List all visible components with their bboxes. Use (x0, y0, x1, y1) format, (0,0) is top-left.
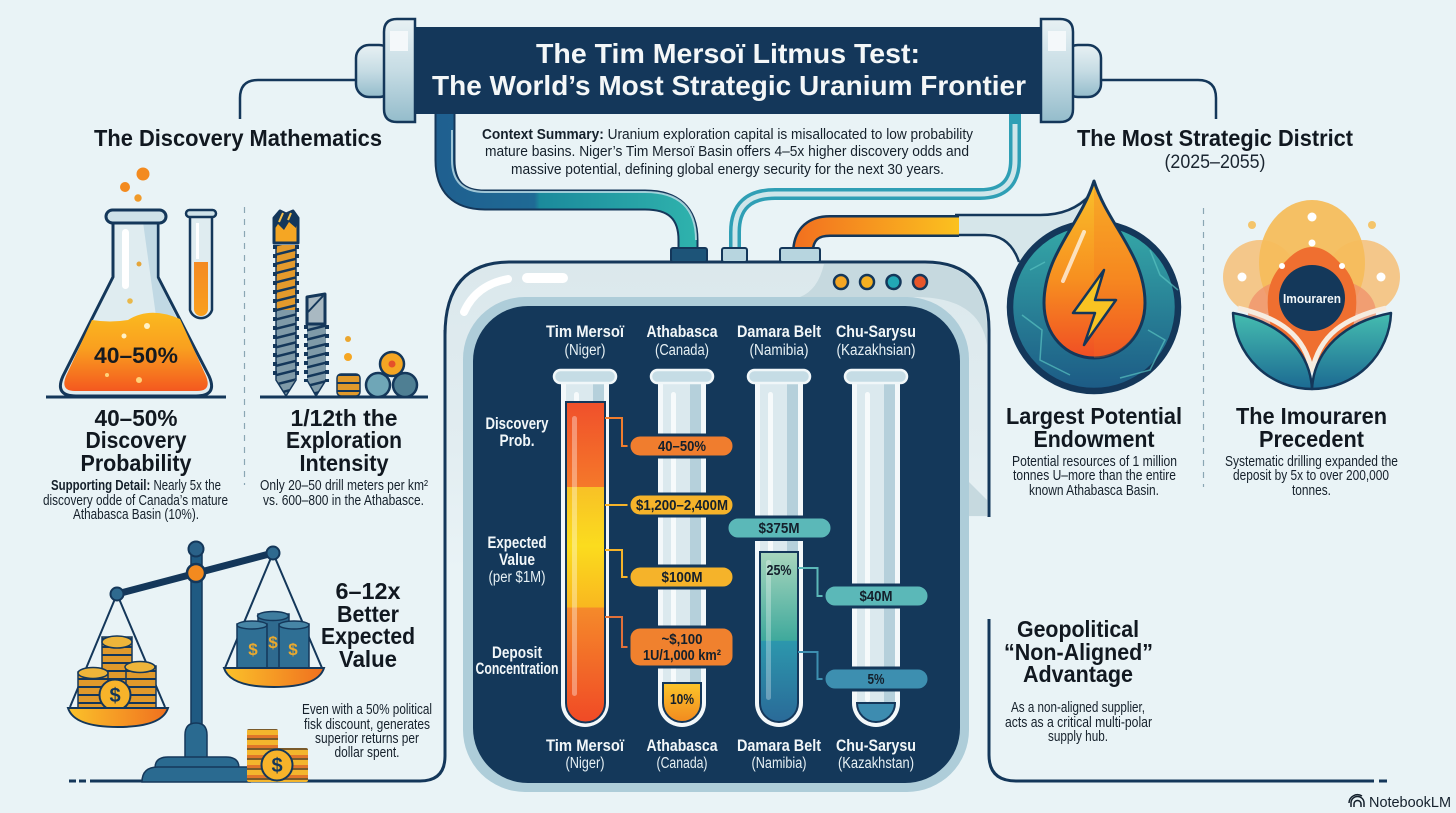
bottom column labels: (Canada) (656, 755, 708, 772)
row labels: Expected (488, 534, 546, 552)
barrels on right pan (237, 612, 309, 668)
stat: Imouraren precedent (1236, 403, 1387, 452)
detail: Imouraren (1225, 454, 1398, 499)
stat: better expected value: 6–12x (336, 578, 401, 604)
context summary: massive potential, defining global energy security for the next 30 years. (511, 162, 944, 178)
floor coin stack (247, 729, 308, 782)
bottom column labels (546, 737, 916, 772)
left pan (68, 708, 168, 727)
top column labels: Athabasca (646, 323, 718, 341)
pipes (445, 114, 1092, 290)
divider (244, 207, 246, 485)
stat: better expected value (321, 578, 415, 672)
bottom column labels: Tim Mersoï (546, 737, 624, 755)
pill values: $40M (860, 588, 892, 605)
core stack (337, 374, 360, 396)
banner right end cap (1041, 19, 1101, 122)
detail: Imouraren: deposit by 5x to over 200,000 (1233, 468, 1389, 484)
row labels: Value (499, 551, 535, 569)
icon: Imouraren flower (1223, 200, 1400, 389)
barrels on right pan: $ (288, 640, 298, 659)
coins on left pan: $ (109, 685, 121, 707)
row labels: (per $1M) (488, 569, 546, 586)
pill values: 5% (868, 671, 884, 688)
device top outline (445, 262, 989, 610)
floor coin stack: $ (271, 755, 283, 777)
stat: non-aligned advantage: Geopolitical (1017, 616, 1139, 642)
pill values (636, 438, 892, 708)
leaf halo (1238, 308, 1386, 372)
pill values: 25% (766, 562, 792, 579)
pill values: ~$,100 (662, 631, 702, 648)
footer dashes (69, 780, 86, 782)
title text: The World’s Most Strategic Uranium Frontier (432, 70, 1026, 101)
stat: largest potential endowment (1006, 403, 1182, 452)
detail: endowment: known Athabasca Basin. (1029, 483, 1159, 499)
detail: expected value (302, 702, 432, 761)
stat: largest potential endowment: Largest Potential (1006, 403, 1182, 429)
divider (1202, 208, 1204, 487)
center circle (1279, 265, 1345, 331)
device shaded corner (800, 264, 987, 345)
ore samples (344, 336, 417, 397)
heading: most strategic district: The Most Strategic District (1077, 125, 1353, 151)
pill values: 10% (670, 691, 694, 708)
stat: largest potential endowment: Endowment (1034, 426, 1155, 452)
context summary: mature basins. Niger’s Tim Mersoï Basin offers 4–5x higher discovery odds and (485, 144, 969, 160)
detail: non-aligned: acts as a critical multi-polar (1005, 715, 1152, 731)
left connector line (240, 80, 355, 119)
stat: better expected value: Value (339, 646, 397, 672)
stat: discovery probability: Probability (80, 450, 192, 476)
pill values: 40–50% (658, 438, 706, 455)
detail: discovery probability (43, 478, 228, 523)
large drill bit (274, 211, 298, 396)
pill values: $100M (662, 569, 702, 586)
pill values: $1,200–2,400M (636, 497, 728, 514)
pill values: $375M (758, 520, 800, 537)
screen bezel (463, 297, 969, 792)
bottom column labels: (Niger) (566, 755, 604, 772)
pipe: light teal (735, 114, 1015, 250)
title text: The Tim Mersoï Litmus Test: (536, 38, 920, 69)
leaves (1233, 313, 1312, 389)
right pan (224, 668, 324, 687)
stat: exploration intensity: Exploration (286, 427, 402, 453)
detail: endowment: Potential resources of 1 million (1012, 454, 1177, 470)
stat: non-aligned advantage (1004, 616, 1153, 687)
detail: Imouraren: Systematic drilling expanded the (1225, 454, 1398, 470)
row labels: Discovery (486, 415, 549, 433)
top column labels: Chu-Sarysu (836, 323, 916, 341)
stat: discovery probability: Discovery (86, 427, 187, 453)
detail: expected value: Even with a 50% political (302, 702, 432, 718)
context summary: Context Summary: Uranium exploration capital is misallocated to low probability (482, 127, 974, 143)
scale stand (142, 549, 250, 782)
value pills (629, 435, 929, 690)
tube: Damara Belt (748, 370, 810, 727)
detail: exploration intensity: Only 20–50 drill meters per km² (260, 478, 428, 494)
icon: energy drop on globe (1010, 181, 1178, 391)
stat: non-aligned advantage: “Non-Aligned” (1004, 639, 1153, 665)
ground lines (46, 396, 428, 398)
icon: balance scale (68, 542, 324, 782)
flask label: 40–50% (94, 343, 178, 368)
tube: Chu-Sarysu (845, 370, 907, 727)
context summary (482, 127, 974, 178)
barrels on right pan: $ (268, 633, 278, 652)
device lower-right facet (969, 482, 987, 516)
stat: discovery probability: 40–50% (94, 405, 178, 431)
left frame line (90, 330, 445, 781)
detail: non-aligned (1005, 700, 1152, 745)
stat: discovery probability (80, 405, 192, 476)
leader lines (605, 418, 825, 679)
stat: Imouraren precedent: Precedent (1259, 426, 1364, 452)
heading: most strategic district: (2025–2055) (1164, 152, 1266, 173)
top column labels: (Namibia) (750, 342, 808, 359)
dark screen (473, 306, 960, 783)
status lights (834, 275, 927, 289)
detail: expected value: superior returns per (315, 731, 419, 747)
barrels on right pan: $ (248, 640, 258, 659)
stat: better expected value: Expected (321, 623, 415, 649)
title banner (356, 19, 1101, 122)
tube: Athabasca (651, 370, 713, 727)
scale beam (117, 553, 273, 594)
bottom column labels: (Namibia) (752, 755, 806, 772)
title text (432, 38, 1026, 101)
pipe: orange (803, 226, 959, 250)
detail: non-aligned: As a non-aligned supplier, (1011, 700, 1145, 716)
detail: expected value: fisk discount, generates (304, 717, 430, 733)
small drill bit (306, 294, 327, 396)
stat: exploration intensity (286, 405, 402, 476)
right frame line (989, 619, 1387, 781)
stat: exploration intensity: Intensity (300, 450, 389, 476)
heading: discovery mathematics: The Discovery Mathematics (94, 125, 382, 151)
scale strings (70, 553, 322, 707)
detail: Imouraren: tonnes. (1292, 483, 1331, 499)
bottom column labels: Chu-Sarysu (836, 737, 916, 755)
detail: discovery probability: Supporting Detail: Nearly 5x the (51, 478, 221, 494)
icon: drill bits (274, 211, 417, 397)
detail: discovery probability: Athabasca Basin (10%). (73, 507, 199, 523)
coins on left pan (78, 636, 156, 710)
device body (445, 262, 989, 792)
top column labels: (Canada) (655, 342, 709, 359)
top column labels: (Kazakhsian) (836, 342, 916, 359)
icon: test tube (186, 210, 216, 318)
detail: non-aligned: supply hub. (1048, 729, 1108, 745)
top column labels: Tim Mersoï (546, 323, 624, 341)
detail: exploration intensity: vs. 600–800 in the Athabasce. (263, 493, 424, 509)
panel: test tube comparison device (445, 248, 989, 792)
bottom column labels: Damara Belt (737, 737, 821, 755)
heading: most strategic district (1077, 125, 1353, 173)
row labels: Concentration (476, 660, 558, 678)
icon: flask (60, 168, 212, 396)
banner bar (415, 27, 1042, 114)
stat: Imouraren precedent: The Imouraren (1236, 403, 1387, 429)
right connector line (1101, 80, 1216, 119)
banner left end cap (356, 19, 415, 122)
pill values: 1U/1,000 km² (643, 647, 721, 664)
row labels: Prob. (500, 432, 534, 450)
row labels (476, 415, 558, 678)
device highlights (464, 279, 508, 312)
stat: exploration intensity: 1/12th the (290, 405, 398, 431)
stat: non-aligned advantage: Advantage (1023, 661, 1133, 687)
NotebookLM logo: NotebookLM (1369, 795, 1451, 811)
connector ports (671, 248, 820, 262)
icon: Imouraren flower: Imouraren (1283, 292, 1341, 306)
detail: discovery probability: discovery odde of Canada’s mature (43, 493, 228, 509)
stat: better expected value: Better (337, 601, 399, 627)
detail: endowment: tonnes U–more than the entire (1013, 468, 1176, 484)
row labels: Deposit (492, 644, 542, 662)
pipe: blue to teal (445, 114, 688, 250)
detail: expected value: dollar spent. (334, 745, 400, 761)
bottom column labels: (Kazakhstan) (838, 755, 914, 772)
top column labels (546, 323, 916, 359)
detail: endowment (1012, 454, 1177, 499)
bottom column labels: Athabasca (646, 737, 718, 755)
funnel to drop (955, 190, 1092, 290)
tube: Tim Mersoi (554, 370, 616, 727)
detail: exploration intensity (260, 478, 428, 509)
top column labels: (Niger) (564, 342, 606, 359)
top column labels: Damara Belt (737, 323, 821, 341)
